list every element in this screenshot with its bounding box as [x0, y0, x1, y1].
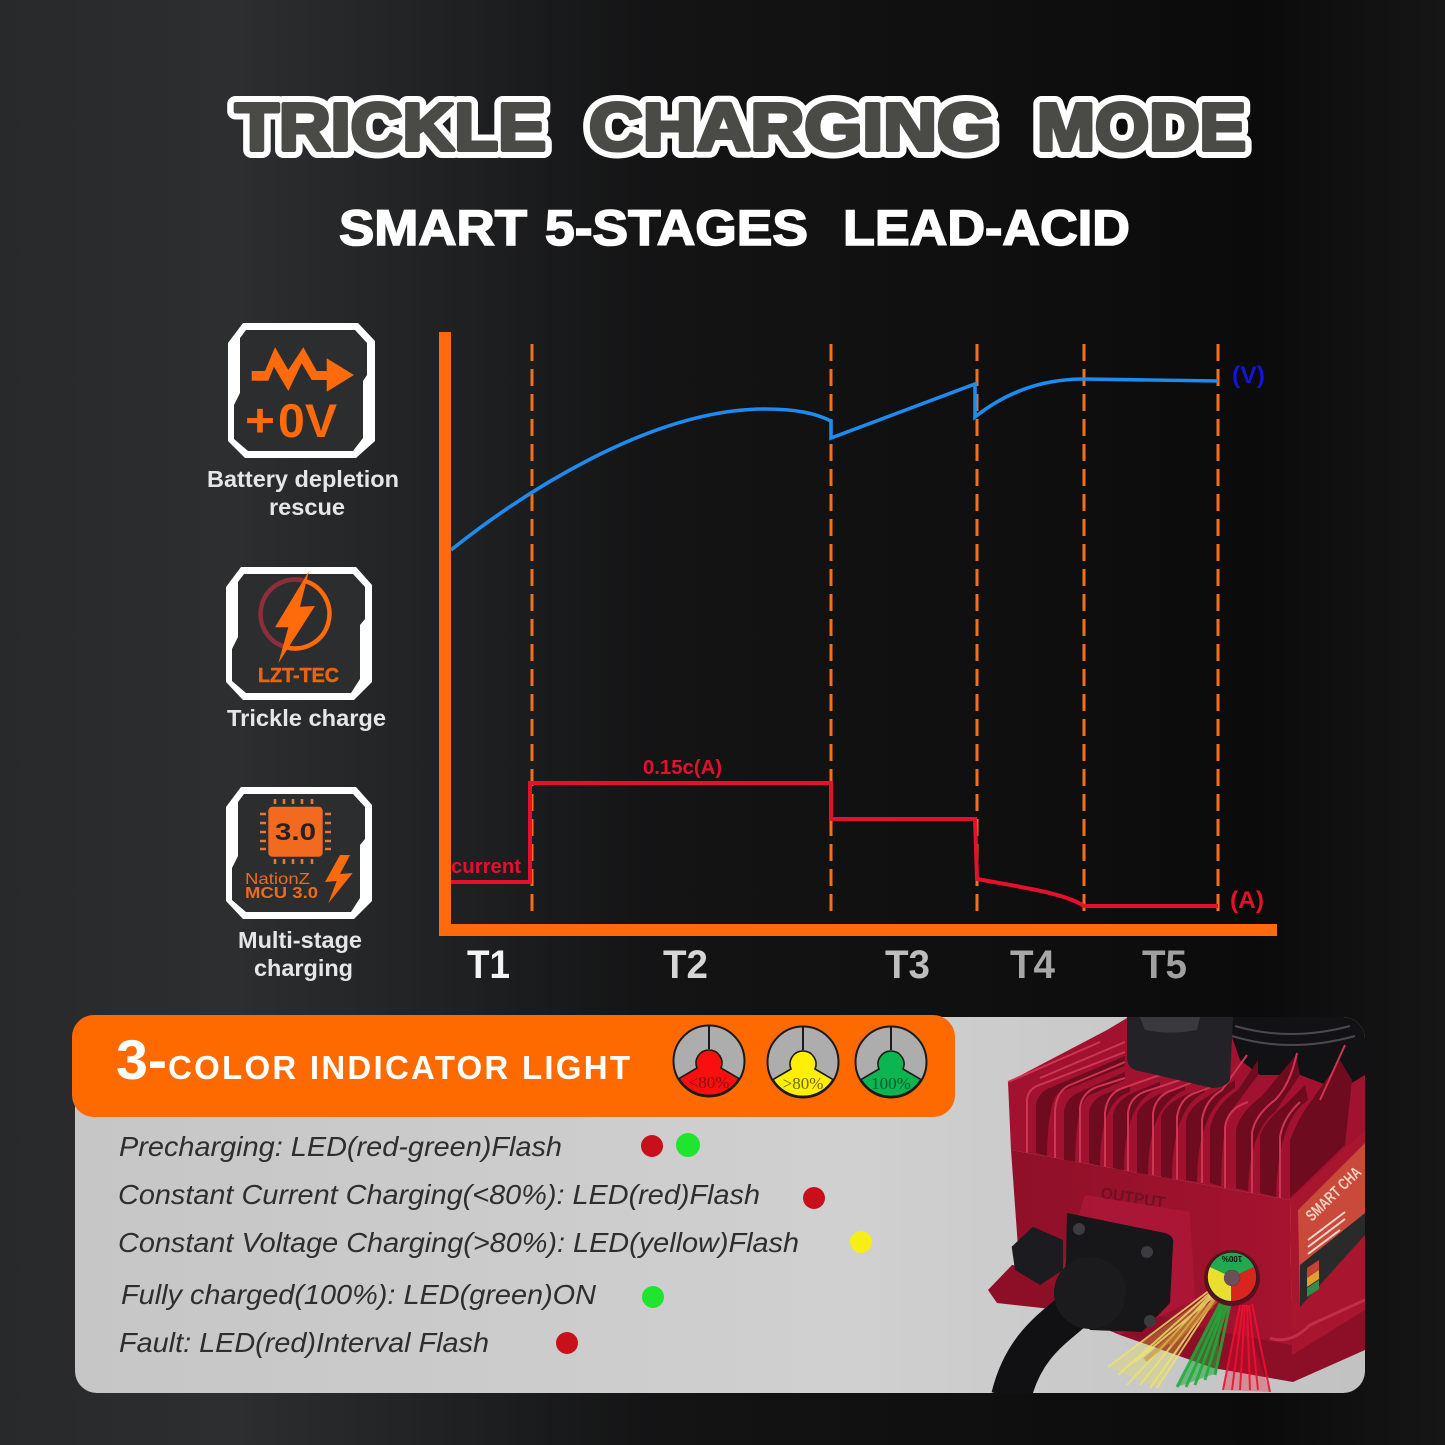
LED dial: 100%	[1222, 1254, 1242, 1263]
fin highlights	[1008, 1042, 1345, 1200]
top plug	[1127, 1017, 1233, 1088]
heading: 3-	[116, 1028, 167, 1091]
status lines: Fault: LED(red)Interval Flash	[119, 1327, 489, 1358]
panel: indicator light	[75, 1017, 1365, 1397]
stage labels: T1	[467, 943, 510, 987]
gauge: above 80 percent	[768, 1026, 838, 1098]
icon: trickle charge: LZT-TEC	[258, 665, 339, 687]
title: TRICKLE	[235, 90, 546, 165]
stage labels	[467, 943, 1187, 987]
black connector	[1065, 1213, 1173, 1332]
title	[235, 90, 1246, 165]
subtitle: LEAD-ACID	[843, 200, 1130, 256]
icon: battery depletion rescue: +	[245, 394, 275, 446]
gauge: below 80 percent: <80%	[689, 1073, 729, 1092]
gauge: below 80 percent	[674, 1026, 744, 1096]
side cap	[1012, 1227, 1063, 1285]
product photo: red charger	[988, 1017, 1365, 1397]
output emboss: OUTPUT	[1099, 1185, 1166, 1212]
base flange	[988, 1265, 1365, 1382]
status lines: Fully charged(100%): LED(green)ON	[121, 1279, 597, 1310]
icon: multi-stage charging: NationZ	[245, 871, 310, 888]
label: multi-stage charging: charging	[254, 955, 353, 981]
title: MODE	[1037, 90, 1246, 165]
label: battery depletion rescue: Battery depletion	[207, 466, 399, 492]
status lines: Precharging: LED(red-green)Flash	[119, 1131, 562, 1162]
LED dial	[1204, 1250, 1260, 1306]
axes	[439, 332, 1277, 936]
label: multi-stage charging: Multi-stage	[238, 927, 362, 953]
title: CHARGING	[589, 90, 995, 165]
label: multi-stage charging	[238, 927, 362, 981]
subtitle: SMART	[339, 200, 527, 256]
icon: trickle charge	[226, 567, 372, 700]
title: CHARGING	[589, 90, 995, 165]
light rays	[1108, 1290, 1270, 1392]
subtitle	[339, 200, 1130, 256]
base highlight	[1270, 1300, 1365, 1340]
label sticker	[1298, 1143, 1365, 1307]
icon: multi-stage charging: 3.0	[275, 819, 316, 846]
gauge: 100 percent	[856, 1026, 926, 1098]
label: battery depletion rescue	[207, 466, 399, 520]
title: MODE	[1037, 90, 1246, 165]
icon: battery depletion rescue	[228, 323, 375, 458]
plateau label: 0.15c(A)	[643, 757, 722, 779]
heading	[116, 1028, 630, 1091]
current curve	[451, 783, 1218, 906]
header bar: 3-color indicator light	[72, 1015, 955, 1117]
label: trickle charge: Trickle charge	[227, 705, 386, 731]
stage labels: T2	[663, 943, 708, 987]
current label: current	[451, 856, 521, 878]
voltage curve	[451, 379, 1218, 550]
status lines: Constant Voltage Charging(>80%): LED(yellow)Flash	[118, 1227, 799, 1258]
heading: COLOR INDICATOR LIGHT	[168, 1049, 630, 1086]
fin block	[1008, 1018, 1365, 1200]
status lines	[118, 1131, 799, 1358]
connector base	[1060, 1195, 1195, 1335]
black cable	[1011, 1300, 1085, 1397]
right face	[1290, 1130, 1365, 1355]
title: TRICKLE	[235, 90, 546, 165]
gauge: above 80 percent: >80%	[783, 1074, 823, 1093]
gauge: 100 percent: 100%	[871, 1074, 911, 1093]
stage labels: T4	[1010, 943, 1056, 987]
label: battery depletion rescue: rescue	[269, 494, 345, 520]
icon: battery depletion rescue: 0V	[278, 394, 338, 447]
sticker brand: SMART CHA	[1303, 1164, 1365, 1225]
voltage label: (V)	[1232, 362, 1265, 389]
dark gaps between fins	[1036, 1055, 1352, 1198]
icon: multi-stage charging: MCU 3.0	[245, 885, 318, 902]
stage labels: T3	[885, 943, 930, 987]
status lines: Constant Current Charging(<80%): LED(red)Flash	[118, 1179, 760, 1210]
ampere label: (A)	[1230, 887, 1264, 914]
subtitle: 5-STAGES	[545, 200, 808, 256]
front face	[1011, 1150, 1292, 1345]
fan and dark recess	[1232, 1017, 1365, 1084]
chart: voltage and current over stages	[439, 332, 1277, 936]
stage labels: T5	[1142, 943, 1187, 987]
status dots	[556, 1133, 872, 1354]
icon: multi-stage charging	[226, 787, 372, 919]
